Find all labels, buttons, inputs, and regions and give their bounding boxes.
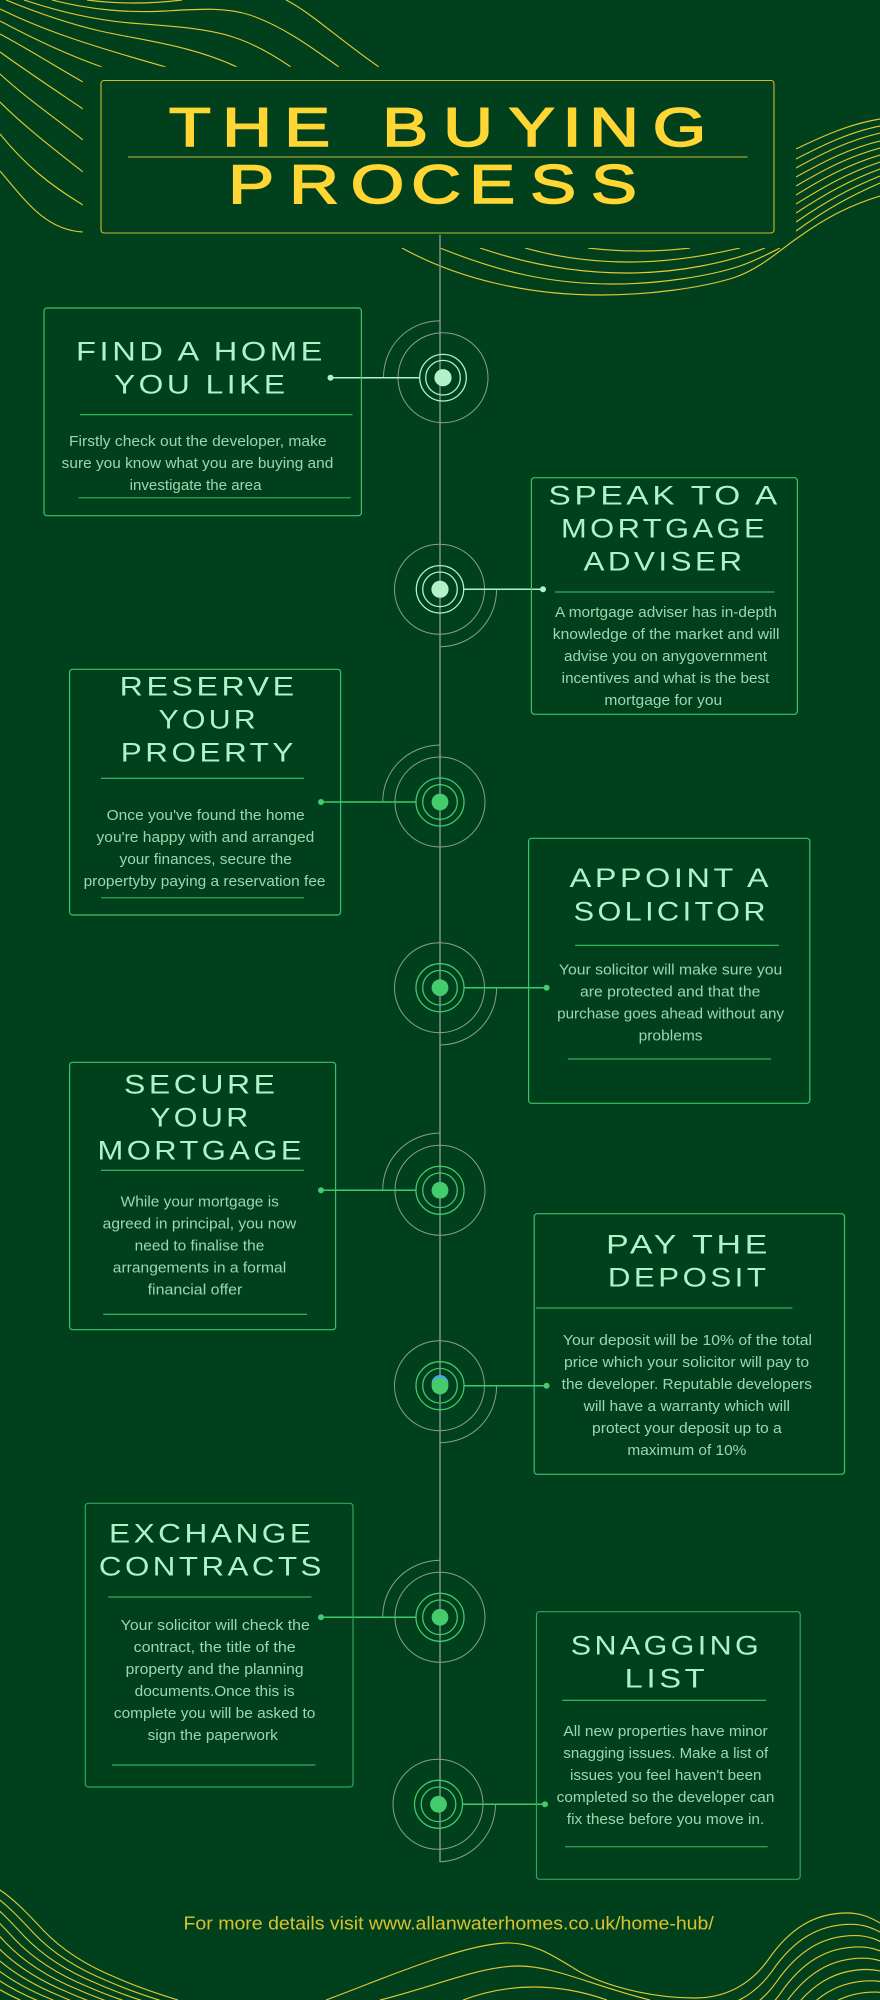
body text: you're happy with and arranged <box>96 829 314 846</box>
panel: exchange contracts <box>85 1503 353 1787</box>
body text <box>557 961 785 1044</box>
body text: sign the paperwork <box>148 1727 278 1744</box>
heading <box>120 671 298 768</box>
heading: RESERVE <box>120 671 298 701</box>
heading: PROERTY <box>121 738 297 768</box>
panel: reserve your property <box>70 669 341 915</box>
waves: top right <box>402 119 880 295</box>
body text: fix these before you move in. <box>567 1811 764 1828</box>
node 6 <box>394 1341 550 1443</box>
body text: mortgage for you <box>604 692 722 709</box>
body text: documents.Once this is <box>135 1683 295 1700</box>
body text: arrangements in a formal <box>113 1259 286 1276</box>
body text: financial offer <box>148 1281 242 1298</box>
body text <box>62 433 333 494</box>
waves: bottom right <box>326 1913 880 2000</box>
body text: Your deposit will be 10% of the total <box>563 1332 812 1349</box>
body text: the developer. Reputable developers <box>562 1376 812 1393</box>
node 1 <box>328 321 488 423</box>
heading: YOUR <box>150 1102 252 1132</box>
body text: snagging issues. Make a list of <box>563 1745 769 1762</box>
body text: will have a warranty which will <box>583 1398 790 1415</box>
body text <box>84 807 325 890</box>
body text: sure you know what you are buying and <box>62 455 333 472</box>
body text: need to finalise the <box>135 1237 264 1254</box>
footer text: For more details visit www.allanwaterhomes.co.uk/home-hub/ <box>184 1913 714 1933</box>
body text: complete you will be asked to <box>114 1705 315 1722</box>
heading: CONTRACTS <box>99 1551 325 1581</box>
panel: appoint a solicitor <box>529 838 810 1103</box>
body text <box>553 604 780 709</box>
heading: YOU LIKE <box>114 370 288 400</box>
heading <box>98 1069 305 1165</box>
node 8 <box>393 1759 548 1862</box>
body text: contract, the title of the <box>134 1639 296 1656</box>
body text: investigate the area <box>130 477 262 494</box>
body text <box>114 1617 315 1744</box>
body text: incentives and what is the best <box>562 670 770 687</box>
body text: property and the planning <box>126 1661 304 1678</box>
heading: SOLICITOR <box>574 896 769 926</box>
body text: completed so the developer can <box>557 1789 774 1806</box>
panel: speak to a mortgage adviser <box>531 478 797 714</box>
body text <box>562 1332 812 1459</box>
node 3 <box>318 745 485 847</box>
panel: find a home <box>44 308 361 516</box>
heading: FIND A HOME <box>76 337 326 367</box>
heading: LIST <box>625 1663 708 1693</box>
node 2 <box>394 544 546 647</box>
title: process: PROCESS <box>228 154 637 215</box>
body text: A mortgage adviser has in-depth <box>555 604 777 621</box>
heading: SNAGGING <box>571 1630 762 1660</box>
panel: snagging list <box>536 1612 800 1879</box>
body text: protect your deposit up to a <box>592 1420 782 1437</box>
body text: advise you on anygovernment <box>564 648 768 665</box>
node 4 <box>394 943 550 1045</box>
heading: MORTGAGE <box>561 514 768 544</box>
panel: pay the deposit <box>534 1214 844 1474</box>
heading: EXCHANGE <box>109 1518 314 1548</box>
heading: SPEAK TO A <box>548 481 781 511</box>
waves: bottom left <box>0 1815 178 2000</box>
body text: agreed in principal, you now <box>103 1215 296 1232</box>
body text <box>103 1193 296 1298</box>
body text: All new properties have minor <box>563 1723 768 1740</box>
heading <box>606 1229 771 1292</box>
title: the buying: THE BUYING <box>169 97 706 158</box>
heading: PAY THE <box>606 1229 771 1259</box>
heading <box>570 863 772 926</box>
body text: your finances, secure the <box>120 851 292 868</box>
body text: Once you've found the home <box>107 807 305 824</box>
heading: SECURE <box>124 1069 278 1099</box>
body text: Your solicitor will make sure you <box>559 961 782 978</box>
heading: DEPOSIT <box>608 1262 769 1292</box>
body text: maximum of 10% <box>627 1442 746 1459</box>
panel: secure your mortgage <box>70 1062 336 1330</box>
heading: MORTGAGE <box>98 1135 305 1165</box>
heading: YOUR <box>158 704 259 734</box>
node 7 <box>318 1560 485 1662</box>
body text: Firstly check out the developer, make <box>69 433 327 450</box>
body text: problems <box>639 1027 703 1044</box>
timeline <box>439 235 441 1862</box>
body text: propertyby paying a reservation fee <box>84 873 325 890</box>
body text: issues you feel haven't been <box>570 1767 762 1784</box>
body text <box>557 1723 774 1828</box>
heading <box>76 337 326 400</box>
body text: are protected and that the <box>580 983 760 1000</box>
waves: top left <box>0 0 379 232</box>
title panel <box>101 80 774 233</box>
body text: While your mortgage is <box>121 1193 279 1210</box>
heading: ADVISER <box>584 547 746 577</box>
body text: price which your solicitor will pay to <box>564 1354 809 1371</box>
heading <box>99 1518 325 1581</box>
body text: knowledge of the market and will <box>553 626 780 643</box>
body text: purchase goes ahead without any <box>557 1005 785 1022</box>
body text: Your solicitor will check the <box>121 1617 310 1634</box>
heading: APPOINT A <box>570 863 772 893</box>
node 5 <box>318 1133 485 1235</box>
heading <box>548 481 781 577</box>
heading <box>571 1630 762 1693</box>
